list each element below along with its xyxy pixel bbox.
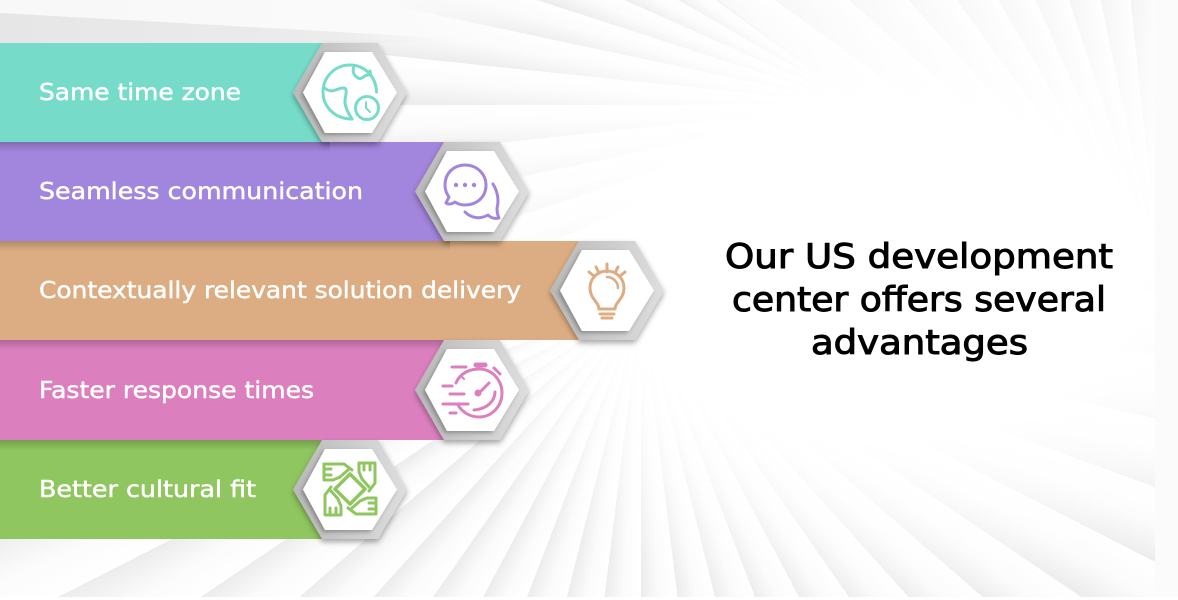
heading: center offers several	[732, 280, 1106, 320]
bar: Seamless communication: Seamless communication	[39, 179, 363, 205]
bar: Faster response times	[0, 340, 445, 440]
bar: Contextually relevant solution delivery	[0, 241, 580, 340]
bar: Contextually relevant solution delivery: Contextually relevant solution delivery	[39, 278, 521, 304]
heading	[725, 237, 1113, 363]
icon: hexagon with chat bubbles	[415, 142, 529, 241]
bar: Faster response times: Faster response times	[39, 378, 314, 404]
background: grey band above first bar	[0, 0, 560, 44]
heading: advantages	[811, 323, 1028, 363]
bar: Same time zone: Same time zone	[39, 80, 241, 106]
bar: Seamless communication	[0, 142, 445, 241]
bar: Better cultural fit	[0, 440, 325, 539]
heading: Our US development	[725, 237, 1113, 277]
icon: hexagon with four linked hands	[293, 440, 407, 539]
icon: hexagon with stopwatch	[415, 340, 529, 440]
icon: hexagon with globe and clock	[293, 43, 407, 142]
bar: Better cultural fit: Better cultural fit	[39, 477, 256, 503]
panel: advantage bars	[0, 43, 580, 539]
bar: Same time zone	[0, 43, 325, 142]
icon: hexagon with light bulb	[550, 241, 664, 340]
